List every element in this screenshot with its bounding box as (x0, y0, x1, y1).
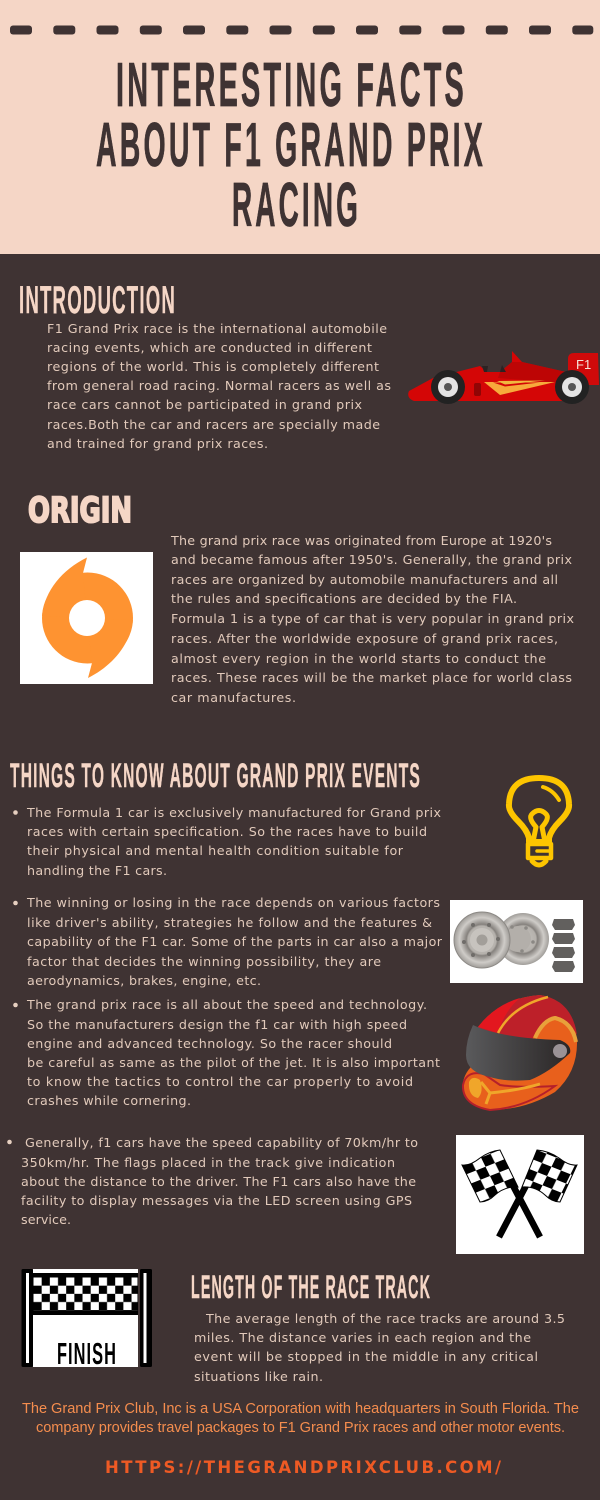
icon: finish line gate: FINISH (57, 1336, 117, 1371)
icon: checkered flags (456, 1135, 584, 1254)
bullet: speed capability: 350km/hr. The flags placed in the track give indication (21, 1155, 395, 1170)
footer: company description (22, 1401, 579, 1436)
bullet: speed capability: Generally, f1 cars have the speed capability of 70km/hr to (25, 1135, 418, 1150)
bullet: speed capability: service. (21, 1212, 71, 1227)
bullet: speed capability: facility to display messages via the LED screen using GPS (21, 1193, 412, 1208)
bullet: speed and technology: engine and advanced technology. So the racer should (27, 1036, 392, 1051)
text: introduction body: race cars cannot be participated in grand prix (47, 397, 362, 412)
text: introduction body: and trained for grand prix races. (47, 436, 268, 451)
panel: introduction (19, 279, 599, 451)
text: origin body: races are organized by automobile manufacturers and all (171, 572, 558, 587)
bullet: speed capability (7, 1135, 418, 1227)
image: brake discs and pads (450, 900, 583, 983)
icon: red F1 car (408, 351, 599, 404)
bullet: manufacture: handling the F1 cars. (27, 863, 167, 878)
bullet: winning factors: The winning or losing in the race depends on various factors (26, 895, 440, 910)
text: introduction body (47, 321, 391, 451)
panel: length of the race track (22, 1269, 565, 1384)
bullet: speed capability: about the distance to the driver. The F1 cars also have the (21, 1174, 416, 1189)
icon: finish line gate (22, 1269, 152, 1371)
text: introduction body: F1 Grand Prix race is the international automobile (47, 321, 387, 336)
text: origin body (170, 533, 574, 705)
text: introduction body: races.Both the car and racers are specially made (47, 417, 380, 432)
text: race track body: situations like rain. (194, 1369, 323, 1384)
heading: origin: ORIGIN (28, 491, 132, 531)
text: origin body: The grand prix race was originated from Europe at 1920's (170, 533, 552, 548)
footer: company description: company provides travel packages to F1 Grand Prix races and other motor events. (36, 1420, 565, 1436)
bullet: winning factors: aerodynamics, brakes, engine, etc. (27, 973, 261, 988)
bullet: speed and technology: So the manufacturers design the f1 car with high speed (27, 1017, 407, 1032)
footer: company description: The Grand Prix Club, Inc is a USA Corporation with headquarters in South Florida. The (22, 1401, 579, 1417)
panel: introduction: INTRODUCTION (19, 279, 176, 322)
text: origin body: almost every region in the world starts to conduct the (171, 651, 546, 666)
icon: racing helmet (463, 995, 577, 1110)
bullet: speed and technology: crashes while cornering. (27, 1093, 191, 1108)
bullet: winning factors: like driver's ability, strategies he follow and the features & (27, 915, 432, 930)
text: introduction body: racing events, which are conducted in different (47, 340, 372, 355)
panel: title header (0, 0, 600, 254)
text: origin body: Formula 1 is a type of car that is very popular in grand prix (171, 611, 574, 626)
text: race track body: event will be stopped in the middle in any critical (194, 1349, 538, 1364)
bullet: speed and technology: to know the tactics to control the car properly to avoid (27, 1074, 413, 1089)
title (96, 51, 486, 240)
bullet: speed and technology: be careful as same as the pilot of the jet. It is also important (27, 1055, 440, 1070)
bullet: winning factors (13, 895, 443, 988)
icon: red F1 car: F1 (576, 357, 591, 372)
text: origin body: the rules and specifications are decided by the FIA. (171, 591, 517, 606)
text: introduction body: from general road racing. Normal racers as well as (47, 378, 391, 393)
text: race track body: miles. The distance varies in each region and the (194, 1330, 531, 1345)
bullet: speed and technology: The grand prix race is all about the speed and technology. (26, 997, 427, 1012)
text: origin body: and became famous after 1950's. Generally, the grand prix (171, 552, 572, 567)
footer: website link: HTTPS://THEGRANDPRIXCLUB.COM/ (105, 1458, 502, 1477)
bullet: manufacture: their physical and mental health condition suitable for (27, 843, 404, 858)
dashed road line (10, 26, 593, 34)
text: origin body: races. After the worldwide exposure of grand prix races, (171, 631, 558, 646)
text: origin body: car manufactures. (171, 690, 296, 705)
panel: things to know (7, 757, 584, 1254)
text: race track body (194, 1311, 565, 1384)
bullet: speed and technology (13, 997, 440, 1108)
panel: origin (20, 491, 574, 705)
icon: light bulb (509, 778, 569, 865)
text: introduction body: regions of the world. This is completely different (47, 359, 379, 374)
bullet: winning factors: capability of the F1 car. Some of the parts in car also a major (27, 934, 443, 949)
text: origin body: races. These races will be the market place for world class (171, 670, 572, 685)
bullet: manufacture (13, 805, 441, 878)
bullet: manufacture: races with certain specification. So the races have to build (27, 824, 427, 839)
bullet: manufacture: The Formula 1 car is exclusively manufactured for Grand prix (26, 805, 441, 820)
title: RACING (232, 171, 361, 240)
text: race track body: The average length of the race tracks are around 3.5 (205, 1311, 565, 1326)
icon: orange origin swirl (20, 552, 153, 684)
bullet: winning factors: factor that decides the winning possibility, they are (27, 954, 381, 969)
